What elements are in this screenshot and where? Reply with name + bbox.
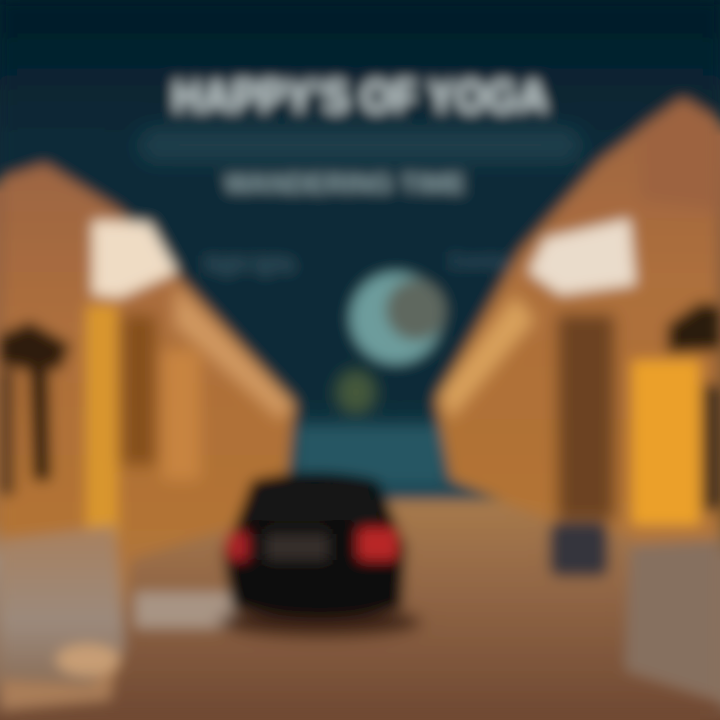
base road strip <box>0 640 720 720</box>
right building <box>435 98 720 700</box>
side caption left: Night lights <box>205 251 295 278</box>
lower road shadow <box>220 608 420 636</box>
right roof top <box>640 100 720 210</box>
side caption right: Evening <box>450 251 510 273</box>
car right tail light <box>358 528 398 560</box>
right ground wall <box>625 540 720 700</box>
right dark edge <box>704 385 720 510</box>
street reflection <box>135 592 235 628</box>
left ground glow <box>56 644 120 676</box>
car rear window <box>250 485 378 520</box>
car left tail light <box>226 532 248 560</box>
left pillar glow <box>162 350 200 480</box>
right parked vehicle <box>550 522 608 576</box>
left dark palm <box>0 322 70 480</box>
title: HAPPY'S OF YOGA <box>172 71 548 122</box>
icon: green tree glow <box>336 370 376 414</box>
right eave light <box>440 295 535 420</box>
tagline: WANDERING TIME <box>225 170 465 198</box>
base right edge <box>700 0 720 720</box>
left building <box>0 163 295 710</box>
left ground wall <box>0 525 125 685</box>
left eave light <box>175 285 295 420</box>
left shadow column <box>122 315 156 465</box>
right dark palm <box>668 303 720 352</box>
car body <box>222 472 406 618</box>
car plate <box>266 534 328 560</box>
right roof highlight <box>528 218 636 295</box>
left dark trunk <box>0 370 14 495</box>
right dark column <box>558 315 614 520</box>
left roof highlight <box>92 220 178 298</box>
right golden window <box>632 360 700 525</box>
left golden column <box>86 305 118 540</box>
road <box>0 500 720 720</box>
icon: crescent moon <box>350 272 446 364</box>
base left edge <box>0 0 20 720</box>
subtitle line <box>140 128 580 162</box>
horizon glow <box>295 425 445 485</box>
car <box>222 472 406 618</box>
